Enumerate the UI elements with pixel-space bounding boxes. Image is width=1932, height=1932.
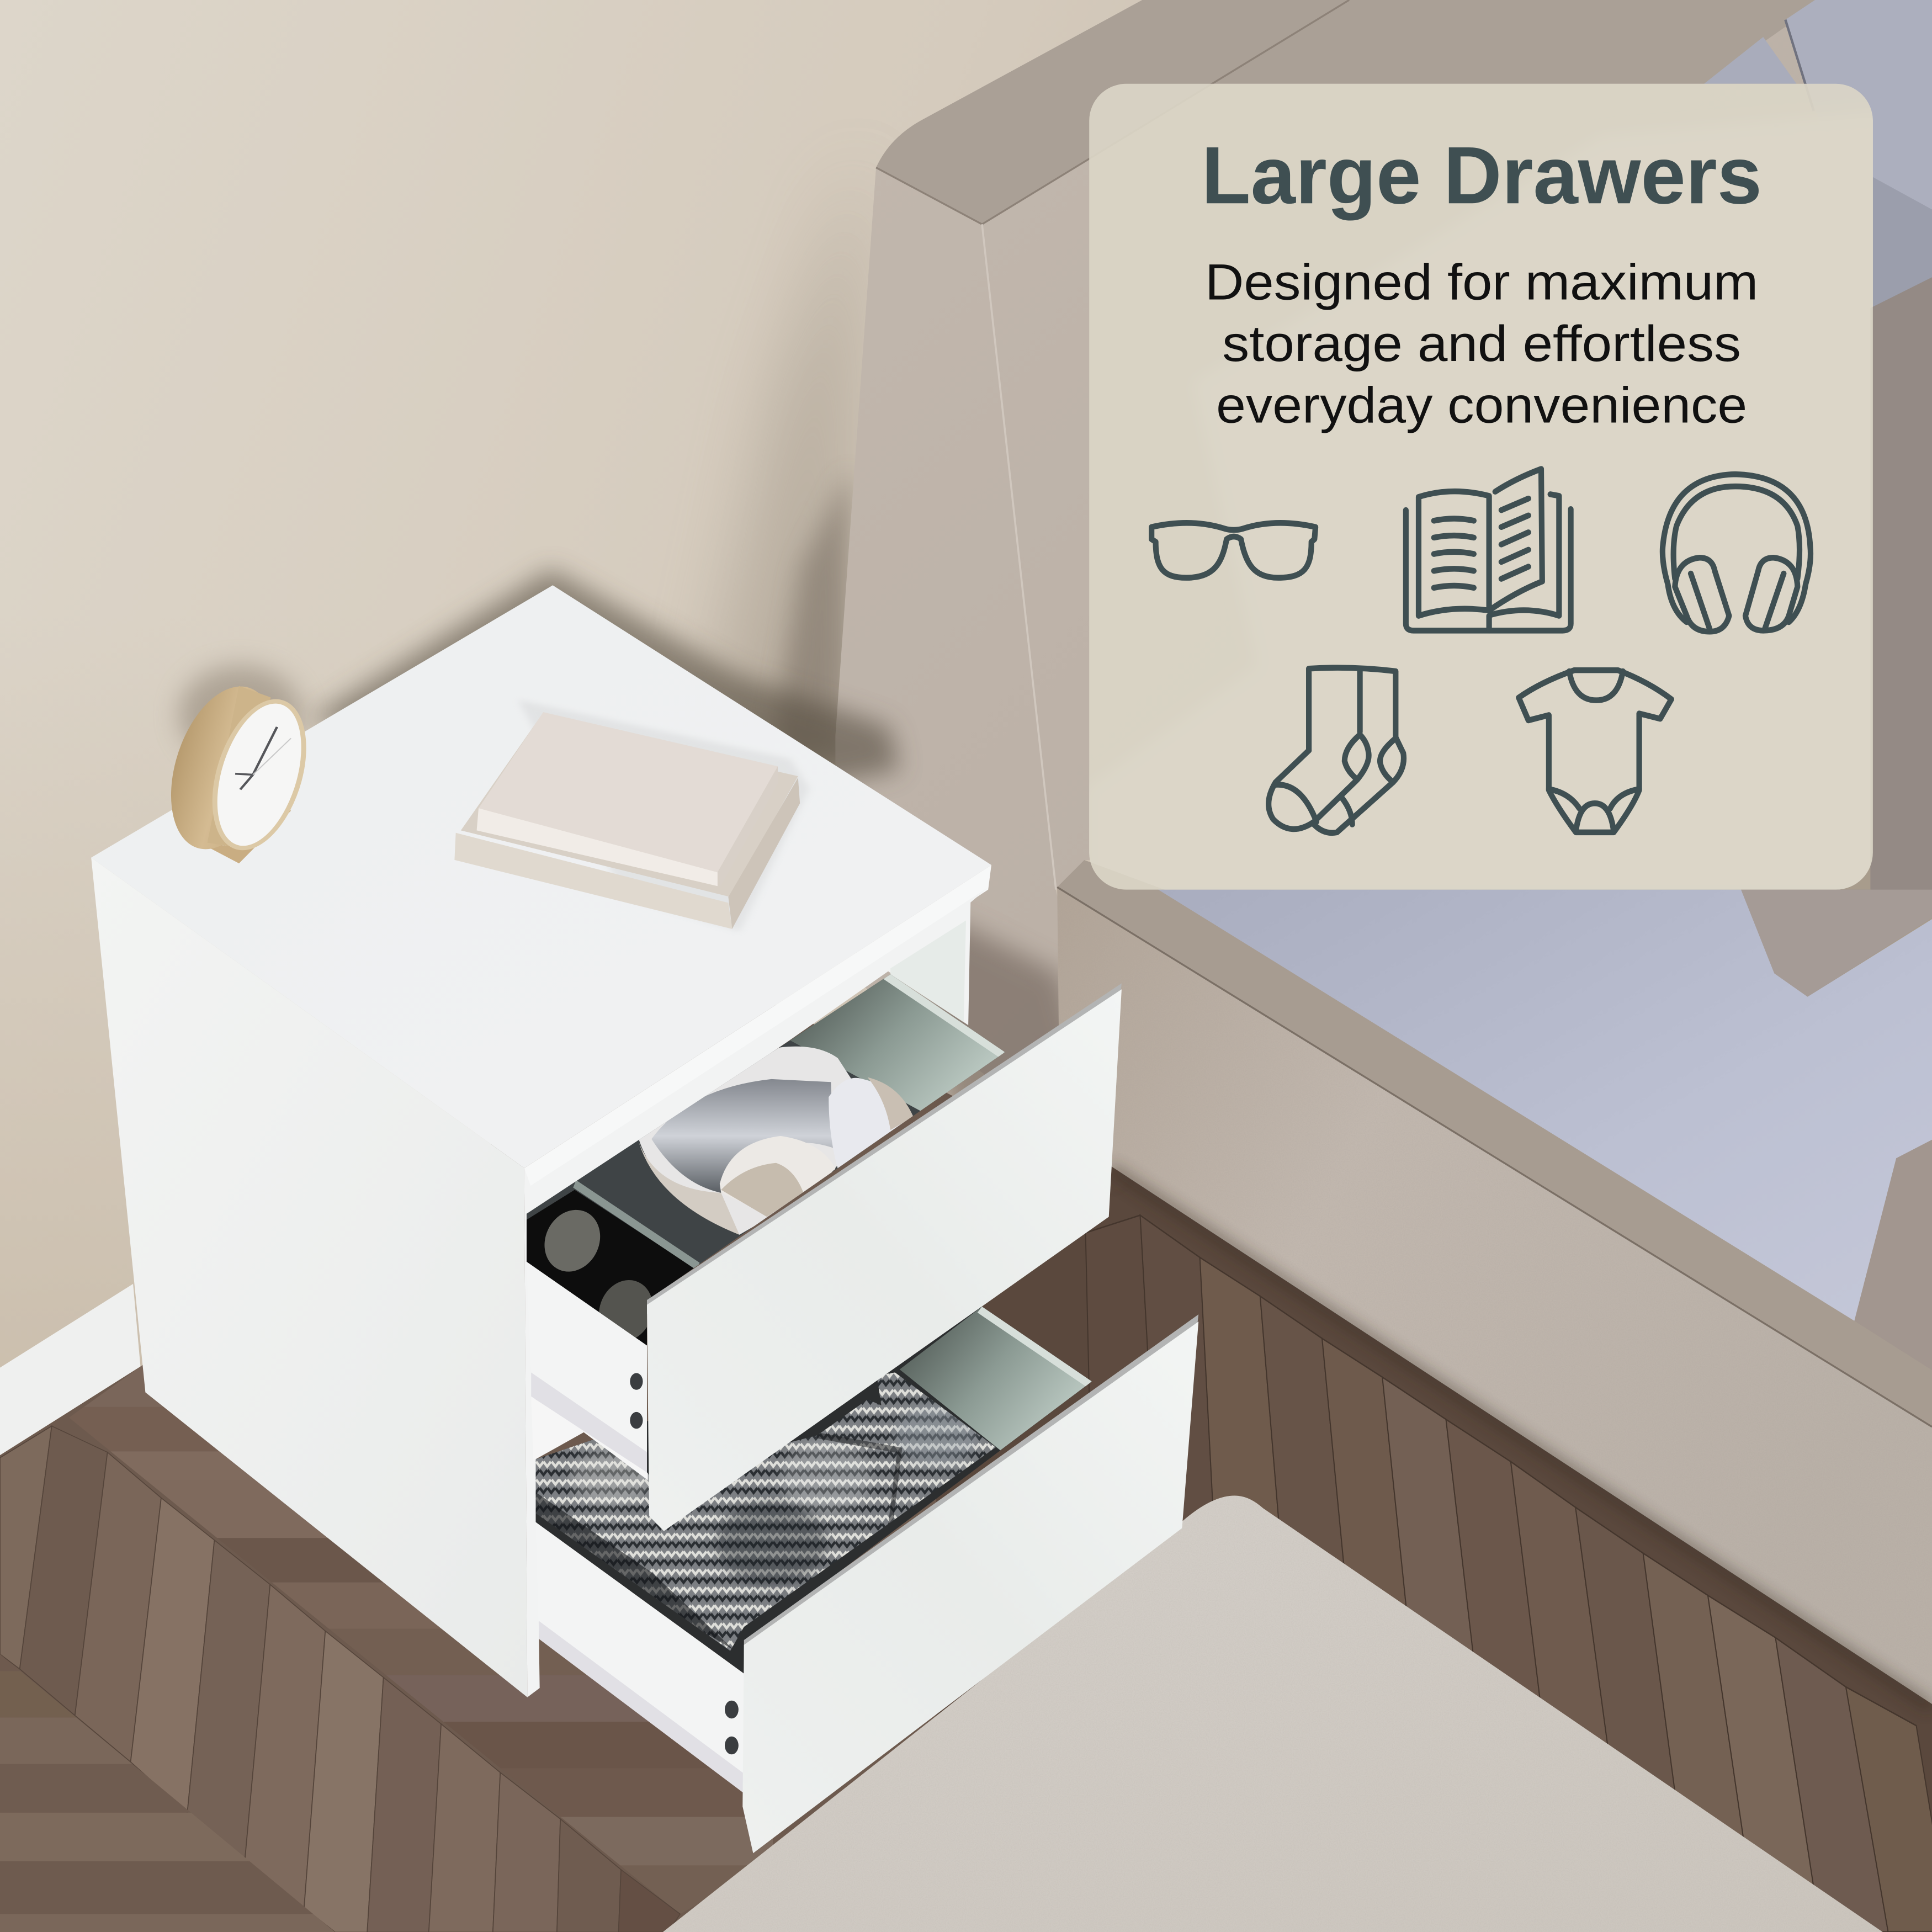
bottom drawer front <box>742 1314 1198 1853</box>
rug <box>663 1495 1883 1932</box>
bottom drawer side <box>535 1522 744 1792</box>
icon: socks <box>1268 668 1404 833</box>
top drawer side <box>527 1262 647 1453</box>
base front <box>1057 887 1932 1704</box>
stacked books <box>454 712 800 929</box>
wood floor <box>0 986 1932 1932</box>
top drawer interior <box>497 938 1046 1357</box>
pillows <box>1084 0 1932 997</box>
throw blanket <box>1854 1140 1932 1370</box>
sunglasses <box>538 1200 607 1282</box>
icon: headphones <box>1663 474 1811 631</box>
knit fabric <box>519 1346 1023 1669</box>
nightstand <box>91 585 1198 1853</box>
cabinet post and underside <box>524 888 988 1220</box>
headphones <box>639 1047 914 1235</box>
book shadow <box>518 700 809 931</box>
description: Designed for maximum <box>1205 254 1758 310</box>
floor planks right <box>936 1110 1932 1932</box>
description: storage and effortless <box>1222 316 1741 372</box>
icons <box>1151 469 1811 833</box>
info panel <box>1089 84 1873 890</box>
top surface <box>91 585 991 1168</box>
bed base <box>1057 860 1932 1708</box>
wall contact shadow <box>770 468 850 764</box>
wall shadow near headboard <box>690 148 862 789</box>
bottom drawer interior <box>497 1238 1138 1717</box>
top drawer front <box>647 983 1122 1531</box>
clock shadow <box>179 665 302 764</box>
shadow under rail <box>1110 1168 1932 1708</box>
clock <box>154 679 322 863</box>
base top strip <box>1057 860 1932 1427</box>
icon: glasses <box>1151 523 1315 578</box>
side panel <box>91 858 527 1697</box>
mattress sheet <box>1158 890 1932 1321</box>
nightstand shadow on wall <box>308 569 899 789</box>
headboard top surface <box>876 0 1824 224</box>
cabinet rail <box>531 1397 648 1480</box>
icon: baby bodysuit <box>1519 670 1671 832</box>
items on top <box>154 679 809 931</box>
title: Large Drawers <box>1201 130 1762 221</box>
description: everyday convenience <box>1216 378 1747 434</box>
front edge strip <box>524 1168 540 1697</box>
floor planks left <box>0 1365 773 1932</box>
headboard shadow from nightstand <box>912 899 1115 1183</box>
screws <box>630 1373 643 1390</box>
drawers <box>497 888 1198 1853</box>
description <box>1205 254 1758 434</box>
front edge of top <box>524 865 991 1195</box>
baseboard <box>0 1284 140 1455</box>
bed headboard <box>835 0 1932 1183</box>
icon: open book <box>1406 469 1571 630</box>
